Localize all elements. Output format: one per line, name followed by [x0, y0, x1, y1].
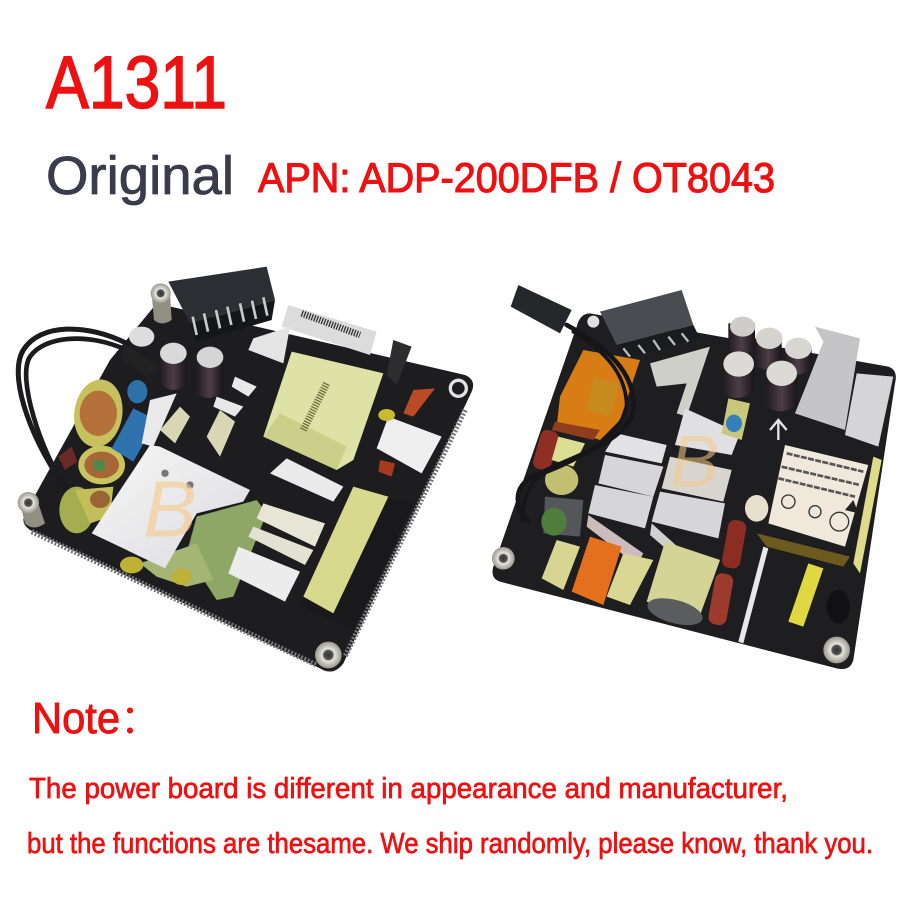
yellow side tape: [853, 457, 882, 573]
mounting posts: [18, 283, 466, 668]
vertical daughter board: [738, 547, 768, 643]
connector plug: [511, 285, 572, 333]
certification label: [745, 445, 868, 547]
part number: APN: ADP-200DFB / OT8043: [258, 154, 775, 201]
finned heatsinks: [228, 458, 343, 602]
green transformer: [120, 500, 267, 600]
capacitors: [129, 327, 223, 398]
subtitle: Original: Original: [46, 146, 234, 206]
large transformer: [263, 352, 383, 470]
right side components: [377, 340, 442, 477]
circuit board right: [492, 313, 896, 669]
orange transformer: [552, 350, 640, 440]
blue capacitors: [112, 380, 157, 462]
barcode label: [282, 305, 377, 355]
red resistors: [707, 519, 747, 626]
heading: Note: ：: [120, 698, 160, 742]
circuit board left: [23, 303, 473, 672]
yellow transformer: [788, 563, 850, 627]
coil under label: [757, 533, 850, 567]
silkscreen arrow: [770, 420, 787, 440]
watermark: B: [670, 421, 719, 503]
cable: [518, 325, 634, 522]
bulk capacitor: [300, 487, 413, 630]
top right heatsinks: [795, 327, 893, 447]
watermark: B: [143, 465, 197, 554]
power connector: [600, 290, 710, 417]
capacitors: [723, 317, 812, 411]
mounting posts: [492, 316, 850, 663]
metal tabs: [587, 515, 702, 575]
toroid coils: [58, 376, 127, 533]
centre heatsink fins: [588, 408, 740, 538]
photo: left power board: [18, 267, 473, 672]
title: A1311: A1311: [46, 41, 227, 124]
power connector: [168, 267, 275, 342]
note line 1: The power board is different in appearance and manufacturer,: [29, 773, 788, 805]
lower left components: [532, 428, 720, 630]
main heatsink: [92, 327, 290, 568]
blue capacitor: [722, 398, 750, 440]
cable: [18, 329, 160, 493]
photo: right power board: [492, 285, 896, 669]
heading: Note: Note: [32, 694, 120, 743]
